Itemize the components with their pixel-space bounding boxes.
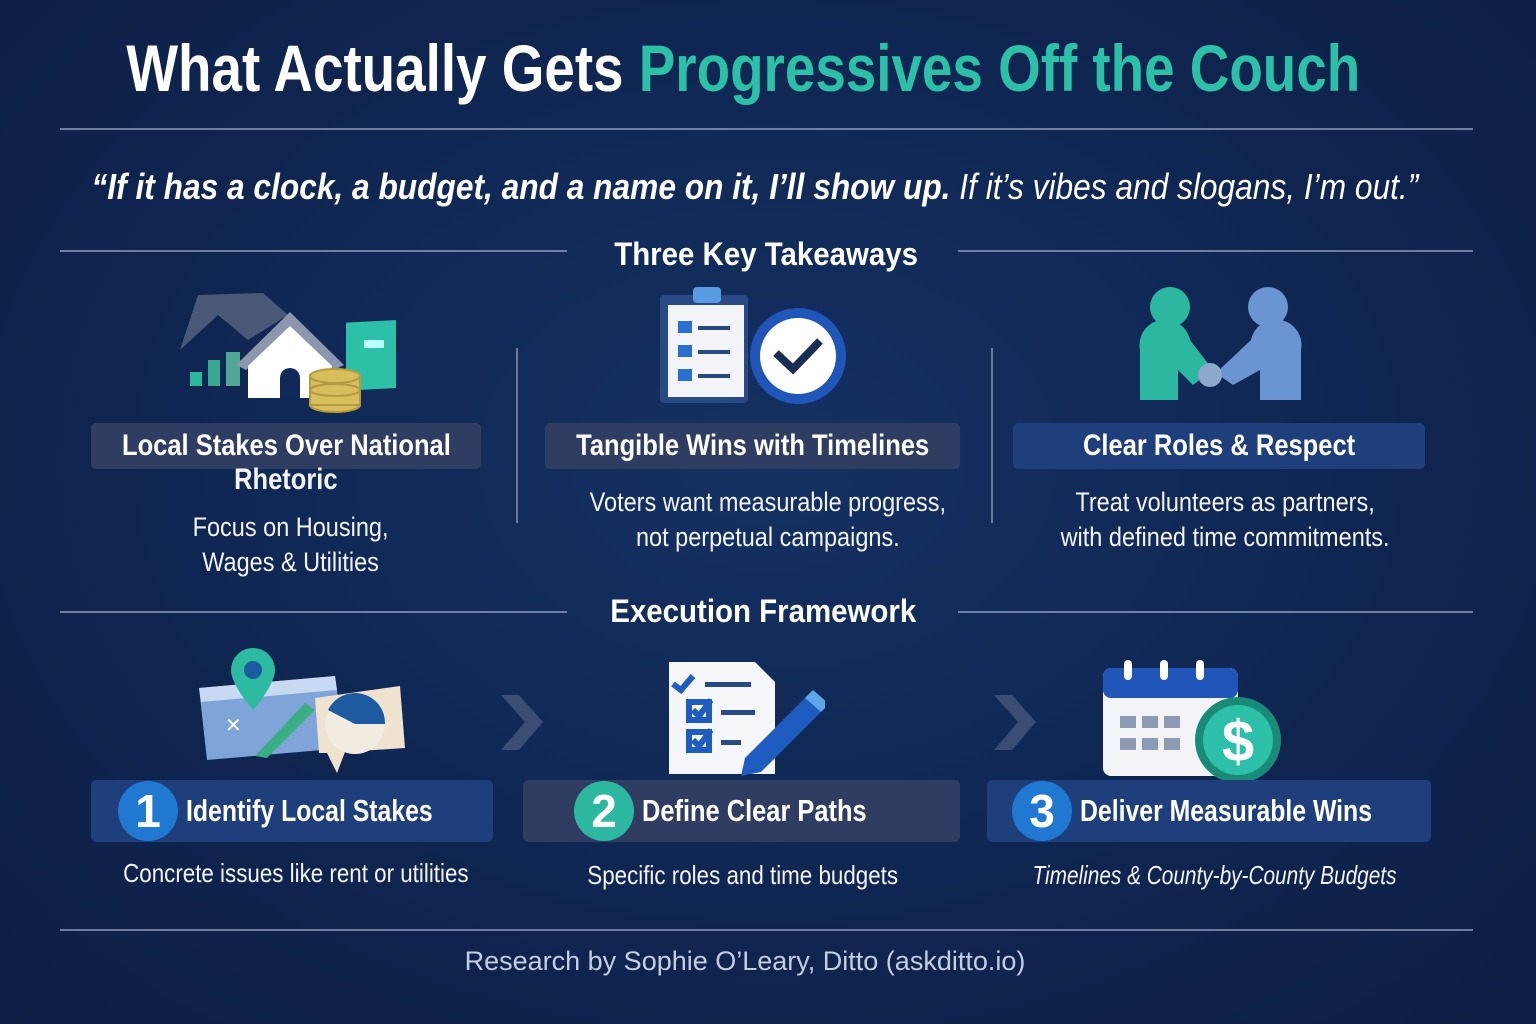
label: local stakes bbox=[91, 423, 481, 469]
desc: local stakes bbox=[193, 512, 389, 577]
icon: map with pin and chart bbox=[199, 648, 405, 773]
arrow 2 bbox=[994, 695, 1036, 750]
step 2: 2 bbox=[591, 785, 617, 837]
quote: “If it has a clock, a budget, and a name on it, I’ll show up. If it’s vibes and slogans, I’m out.” bbox=[92, 166, 1418, 207]
desc: local stakes: Wages & Utilities bbox=[203, 547, 379, 577]
label: local stakes: Local Stakes Over National bbox=[122, 429, 450, 462]
desc: tangible wins: Voters want measurable progress, bbox=[589, 487, 946, 517]
icon: clipboard and clock bbox=[660, 287, 846, 404]
desc: clear roles: Treat volunteers as partners, bbox=[1076, 487, 1375, 517]
label: tangible wins: Tangible Wins with Timelines bbox=[576, 429, 929, 462]
desc: tangible wins: not perpetual campaigns. bbox=[636, 522, 899, 552]
desc: tangible wins bbox=[589, 487, 946, 552]
step 1: Identify Local Stakes bbox=[186, 793, 433, 828]
step 1 bbox=[91, 780, 493, 842]
heading: execution framework: Execution Framework bbox=[610, 593, 916, 629]
icon: map with pin and chart: ✕ bbox=[225, 715, 242, 737]
step 1: 1 bbox=[135, 785, 161, 837]
step 3: Deliver Measurable Wins bbox=[1080, 793, 1372, 828]
footer: Research by Sophie O’Leary, Ditto (askditto.io) bbox=[465, 946, 1025, 976]
label: clear roles: Clear Roles & Respect bbox=[1083, 429, 1355, 462]
desc: clear roles bbox=[1060, 487, 1390, 552]
desc: local stakes: Focus on Housing, bbox=[193, 512, 389, 542]
heading: three key takeaways: Three Key Takeaways bbox=[614, 236, 918, 272]
title: What Actually Gets Progressives Off the Couch bbox=[126, 31, 1360, 105]
step 3 bbox=[987, 780, 1431, 842]
icon: house with coins bbox=[180, 293, 396, 413]
step 2: Define Clear Paths bbox=[642, 793, 867, 828]
label: clear roles bbox=[1013, 423, 1425, 469]
step 3: 3 bbox=[1029, 785, 1055, 837]
arrow 1 bbox=[501, 695, 543, 750]
icon: calendar with dollar coin: $ bbox=[1222, 709, 1254, 774]
text: Rhetoric bbox=[234, 463, 338, 496]
sub 1: Concrete issues like rent or utilities bbox=[123, 858, 469, 888]
sub 3: Timelines & County-by-County Budgets bbox=[1032, 860, 1396, 890]
step 2 bbox=[523, 780, 960, 842]
desc: clear roles: with defined time commitments. bbox=[1061, 522, 1390, 552]
sub 2: Specific roles and time budgets bbox=[588, 860, 898, 890]
icon: checklist with pen bbox=[669, 662, 825, 776]
icon: calendar with dollar coin bbox=[1103, 660, 1281, 780]
label: tangible wins bbox=[545, 423, 960, 469]
icon: handshake people bbox=[1140, 287, 1302, 400]
